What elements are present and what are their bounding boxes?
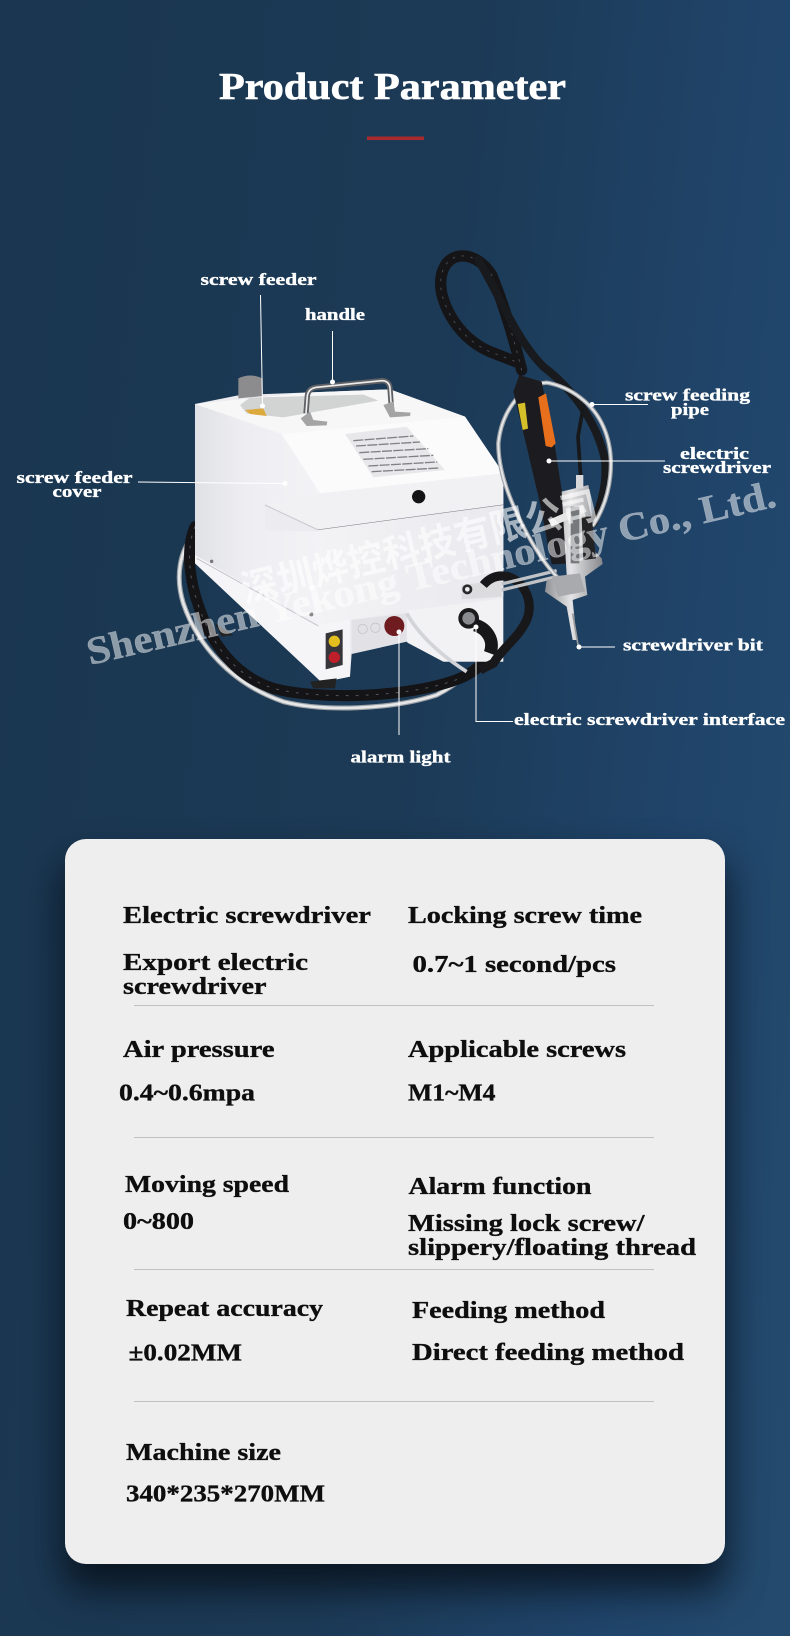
callout: alarm light: alarm light bbox=[350, 748, 451, 766]
black knob bbox=[412, 490, 425, 503]
row 4: repeat accuracy / feeding method: Feeding method bbox=[412, 1298, 606, 1324]
row 5: machine size: Machine size bbox=[126, 1440, 281, 1466]
row 1: electric screwdriver / locking screw time: Electric screwdriver bbox=[123, 903, 371, 929]
callout: handle bbox=[305, 305, 366, 384]
row 4: repeat accuracy / feeding method: Direct feeding method bbox=[412, 1340, 685, 1366]
handle bbox=[301, 381, 411, 426]
row 3: moving speed / alarm function: Alarm function bbox=[408, 1174, 592, 1200]
row 3: moving speed / alarm function: Moving speed bbox=[125, 1172, 290, 1198]
top hopper and cap bbox=[238, 375, 378, 417]
callout: electric screwdriver: electric bbox=[680, 444, 750, 463]
row 2: air pressure / applicable screws bbox=[119, 1037, 626, 1106]
callout: electric screwdriver interface bbox=[474, 624, 786, 729]
row 3: moving speed / alarm function: 0~800 bbox=[123, 1209, 194, 1235]
panel shadow bbox=[65, 839, 725, 1564]
callout: screw feeder cover: screw feeder bbox=[16, 468, 133, 487]
callout: electric screwdriver bbox=[546, 444, 772, 477]
callout: screw feeder cover: cover bbox=[52, 482, 102, 501]
callout: screw feeder cover bbox=[16, 468, 288, 501]
electric screwdriver interface socket bbox=[458, 608, 491, 653]
row 1: electric screwdriver / locking screw time: screwdriver bbox=[123, 974, 267, 1000]
row 4: repeat accuracy / feeding method: ±0.02MM bbox=[128, 1340, 242, 1366]
callout: alarm light bbox=[350, 630, 451, 766]
row 4: repeat accuracy / feeding method bbox=[126, 1296, 685, 1366]
spiral cable and tube around the base bbox=[179, 527, 492, 708]
callout: screw feeding pipe: screw feeding bbox=[625, 386, 751, 404]
title: Product Parameter bbox=[219, 66, 566, 108]
callout: handle: handle bbox=[305, 305, 366, 324]
product photo: screw feeding machine bbox=[179, 256, 611, 708]
alarm light lens bbox=[384, 616, 404, 636]
callout: screw feeder: screw feeder bbox=[200, 270, 317, 289]
row 1: electric screwdriver / locking screw time: Locking screw time bbox=[408, 903, 642, 929]
panel: parameters bbox=[65, 839, 725, 1564]
callout: screw feeder bbox=[200, 270, 317, 408]
watermark: company name in Chinese: 深圳烨控科技有限公司 bbox=[235, 474, 602, 614]
callout: electric screwdriver: screwdriver bbox=[663, 458, 772, 477]
feeding mechanism and nozzle bbox=[545, 475, 603, 647]
row 5: machine size: 340*235*270MM bbox=[126, 1482, 325, 1508]
row 2: air pressure / applicable screws: Applicable screws bbox=[408, 1037, 626, 1063]
instruction sticker bbox=[345, 427, 445, 477]
electric screwdriver bbox=[513, 375, 572, 564]
row 4: repeat accuracy / feeding method: Repeat accuracy bbox=[126, 1296, 323, 1322]
watermark: company name in English: Shenzhen Yekong Technology Co., Ltd. bbox=[82, 473, 780, 674]
callout: screwdriver bit bbox=[576, 636, 763, 654]
machine body bbox=[195, 389, 503, 688]
callout: screwdriver bit: screwdriver bit bbox=[623, 636, 763, 654]
callout: screw feeding pipe: pipe bbox=[671, 400, 710, 419]
title accent bar bbox=[367, 136, 424, 140]
row 1: electric screwdriver / locking screw time: Export electric bbox=[123, 950, 308, 976]
callout: screw feeding pipe bbox=[590, 386, 751, 419]
side bracket with tube fittings bbox=[407, 571, 557, 672]
control switch panel bbox=[326, 629, 343, 669]
row 1: electric screwdriver / locking screw time bbox=[123, 903, 642, 1000]
row 2: air pressure / applicable screws: 0.4~0.6mpa bbox=[119, 1080, 255, 1106]
row 3: moving speed / alarm function: slippery/floating thread bbox=[408, 1235, 697, 1261]
row 3: moving speed / alarm function: Missing lock screw/ bbox=[408, 1211, 645, 1237]
row 3: moving speed / alarm function bbox=[123, 1172, 697, 1261]
hoses above the screwdriver bbox=[441, 256, 611, 578]
row 1: electric screwdriver / locking screw time: 0.7~1 second/pcs bbox=[412, 952, 616, 978]
callout: electric screwdriver interface: electric screwdriver interface bbox=[514, 710, 786, 729]
row 2: air pressure / applicable screws: M1~M4 bbox=[408, 1080, 496, 1106]
row 5: machine size bbox=[126, 1440, 325, 1508]
row 2: air pressure / applicable screws: Air pressure bbox=[123, 1037, 275, 1063]
